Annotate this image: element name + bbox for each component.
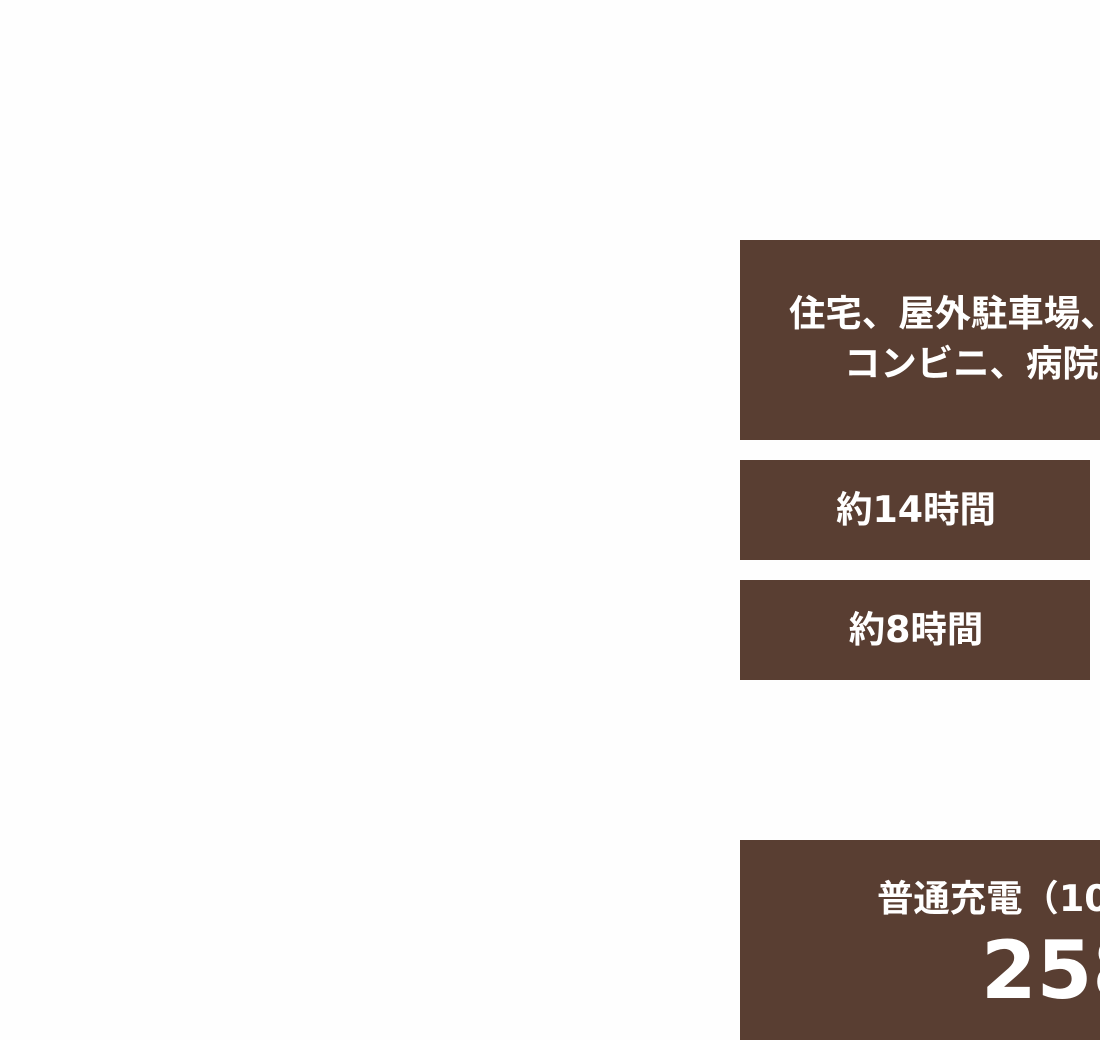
panel: charge time 14 hours	[740, 460, 1090, 560]
panel: locations	[740, 240, 1100, 440]
text: locations line 2: コンビニ、病院	[844, 342, 1099, 385]
panel: charge time 8 hours	[740, 580, 1090, 680]
text: about 14 hours: 約14時間	[836, 488, 996, 531]
text: about 8 hours: 約8時間	[849, 608, 983, 651]
panel: normal charging cost	[740, 840, 1100, 1040]
